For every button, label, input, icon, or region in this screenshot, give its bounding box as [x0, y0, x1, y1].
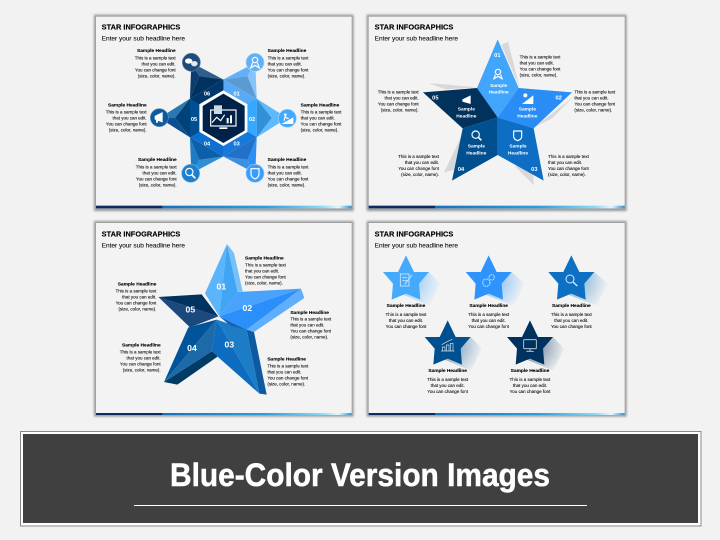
text block 02: (size, color, name). — [574, 107, 612, 112]
text block 03: (size, color, name). — [267, 382, 305, 387]
text block 01 — [520, 54, 561, 77]
text block 03: This is a sample text — [267, 364, 309, 369]
segment numbers — [432, 53, 562, 173]
text block 04: that you can edit. — [127, 355, 161, 360]
text block: top left: Sample Headline — [137, 48, 176, 54]
arm 04 — [164, 320, 219, 385]
text block: top left — [135, 48, 176, 78]
text block star 2: This is a sample text — [468, 312, 510, 317]
text block: middle right: (size, color, name). — [301, 128, 339, 133]
text block star 2: You can change font — [468, 324, 510, 329]
text block star 5: that you can edit. — [513, 383, 547, 388]
text block: middle left — [106, 103, 147, 133]
text block star 1: This is a sample text — [386, 312, 427, 317]
text block 05 — [378, 89, 419, 112]
step numbers: 05 — [191, 117, 197, 123]
segment icons — [462, 69, 533, 141]
text block: bottom right: This is a sample text — [268, 164, 309, 169]
banner heading: Blue-Color Version Images — [170, 457, 550, 493]
text block 05: Sample Headline — [118, 281, 157, 287]
text block star 3 — [551, 303, 593, 329]
subtitle: Enter your sub headline here — [102, 243, 186, 249]
text block star 3: This is a sample text — [551, 312, 593, 317]
arm numbers: 02 — [243, 303, 252, 313]
segment numbers: 02 — [556, 96, 562, 102]
3D star chart — [158, 244, 304, 395]
star 3 with magnifier icon — [548, 255, 608, 306]
text block 05: You can change font — [378, 101, 419, 106]
text block 04: that you can edit. — [405, 160, 439, 165]
text block star 4: This is a sample text — [427, 377, 469, 382]
text block: middle right — [301, 103, 342, 133]
segment 01 — [477, 39, 519, 117]
text block star 5: This is a sample text — [510, 377, 551, 382]
text block 03: This is a sample text — [548, 154, 590, 159]
segment numbers: 03 — [531, 167, 537, 173]
arm numbers: 03 — [225, 340, 234, 350]
text block 05: This is a sample text — [115, 288, 157, 293]
six-arm star chart — [159, 53, 287, 183]
step numbers: 06 — [204, 91, 210, 97]
banner — [20, 431, 702, 526]
text block 04: You can change font — [398, 166, 440, 171]
text block 01: that you can edit. — [520, 60, 554, 65]
text block 05: that you can edit. — [385, 95, 419, 100]
star 1 with document icon — [383, 255, 440, 306]
text block 04: You can change font — [120, 361, 161, 366]
text block 01: that you can edit. — [245, 268, 279, 273]
segment 05 — [423, 88, 498, 128]
text block 01: Sample Headline — [245, 255, 284, 261]
text block 03 — [267, 357, 309, 387]
icon: speech bubbles — [182, 53, 200, 71]
text block 02 — [574, 89, 616, 112]
text block 05: This is a sample text — [378, 89, 419, 94]
text block 02: You can change font — [290, 328, 332, 333]
text block: bottom left: that you can edit. — [143, 170, 177, 175]
text block star 4: that you can edit. — [431, 383, 465, 388]
text block 02: (size, color, name). — [290, 334, 328, 339]
text block 01: (size, color, name). — [520, 72, 558, 77]
segment labels: Sample — [519, 107, 536, 113]
step numbers: 01 — [234, 91, 240, 97]
subtitle: Enter your sub headline here — [375, 36, 459, 42]
text block star 3: that you can edit. — [554, 318, 588, 323]
text block 05: (size, color, name). — [381, 107, 419, 112]
text block: bottom left — [136, 157, 177, 187]
step numbers — [191, 91, 255, 148]
step numbers: 04 — [204, 142, 211, 148]
title: STAR INFOGRAPHICS — [102, 232, 181, 239]
text block star 1: Sample Headline — [387, 303, 426, 309]
text block 02 — [290, 310, 332, 339]
title: STAR INFOGRAPHICS — [375, 25, 454, 32]
subtitle: Enter your sub headline here — [102, 36, 186, 42]
text block 05: (size, color, name). — [118, 306, 156, 311]
text block star 4 — [427, 368, 469, 394]
arm 03 — [212, 320, 267, 395]
text block star 2 — [468, 303, 510, 329]
star 4 with chart icon — [425, 320, 482, 371]
icon: award ribbon — [246, 53, 264, 71]
arm numbers — [186, 282, 252, 353]
text block 03: You can change font — [548, 166, 589, 171]
text block: top right: You can change font — [268, 67, 309, 72]
icon: megaphone — [150, 109, 168, 127]
text block 02: You can change font — [574, 101, 616, 106]
text block: bottom left: Sample Headline — [138, 157, 177, 163]
segment 04 — [452, 117, 498, 181]
text block: top right — [268, 48, 309, 78]
step numbers: 02 — [249, 117, 255, 123]
text block star 5 — [510, 368, 551, 394]
text block: bottom right: Sample Headline — [268, 157, 307, 163]
segment labels — [456, 83, 538, 156]
segment 03 — [498, 117, 544, 181]
text block 01: This is a sample text — [245, 262, 287, 267]
icon: shield — [246, 164, 264, 182]
title: STAR INFOGRAPHICS — [102, 25, 181, 32]
text block 03: that you can edit. — [548, 160, 582, 165]
text block star 5: You can change font — [510, 389, 551, 394]
text block 02: Sample Headline — [290, 310, 329, 316]
segment labels: Headline — [489, 89, 509, 95]
text block: top left: (size, color, name). — [138, 73, 176, 78]
text block 03 — [548, 154, 590, 177]
text block: bottom left: (size, color, name). — [139, 182, 177, 187]
panel: slide 3, 3D star — [94, 221, 354, 417]
text block star 1 — [386, 303, 427, 329]
text block 05 — [115, 281, 157, 311]
gray star shadows — [429, 42, 573, 185]
text block: bottom right: (size, color, name). — [268, 182, 306, 187]
text block: bottom right: You can change font — [268, 176, 309, 181]
text block: bottom left: You can change font — [136, 176, 177, 181]
text block 05: that you can edit. — [122, 294, 156, 299]
text block: middle left: that you can edit. — [113, 116, 147, 121]
segment labels: Headline — [466, 150, 487, 156]
arm numbers: 04 — [187, 343, 197, 353]
text block: top right: (size, color, name). — [268, 73, 306, 78]
text block: middle left: Sample Headline — [108, 103, 147, 109]
segment labels: Headline — [508, 150, 528, 156]
text block: top right: This is a sample text — [268, 55, 309, 60]
text block star 1: You can change font — [386, 324, 427, 329]
text block: middle left: (size, color, name). — [109, 128, 147, 133]
segment numbers: 05 — [432, 95, 438, 101]
segment labels: Sample — [458, 107, 475, 113]
segment labels: Headline — [517, 113, 538, 119]
text block 02: This is a sample text — [574, 89, 616, 94]
text block 01 — [245, 255, 287, 285]
text block star 2: that you can edit. — [472, 318, 506, 323]
arm 02 — [219, 289, 304, 332]
text block 03: that you can edit. — [267, 370, 301, 375]
arm 05 — [158, 294, 218, 327]
segment numbers: 01 — [494, 53, 500, 59]
text block 01: You can change font — [245, 274, 286, 279]
center hexagon with dashboard icon — [200, 91, 247, 146]
text block: top left: You can change font — [135, 67, 176, 72]
text block 04: (size, color, name). — [401, 172, 439, 177]
text block: middle right: that you can edit. — [301, 116, 335, 121]
text block 02: This is a sample text — [290, 316, 332, 321]
text block 03: You can change font — [267, 376, 309, 381]
text block 04: (size, color, name). — [123, 367, 161, 372]
arm 01 — [205, 244, 243, 316]
text block 04: This is a sample text — [398, 154, 440, 159]
panel: slide 4, five separate stars — [367, 221, 627, 417]
text block 02: that you can edit. — [574, 95, 608, 100]
text block 04: Sample Headline — [122, 343, 161, 349]
text block: middle left: This is a sample text — [106, 110, 147, 115]
text block 04 — [398, 154, 440, 177]
text block: middle right: This is a sample text — [301, 110, 342, 115]
text block 01: (size, color, name). — [245, 280, 283, 285]
five-point star chart — [423, 39, 572, 181]
text block 01: You can change font — [520, 66, 561, 71]
segment 02 — [498, 88, 572, 128]
title: STAR INFOGRAPHICS — [375, 232, 454, 239]
segment labels: Sample — [509, 144, 527, 150]
text block star 1: that you can edit. — [389, 318, 423, 323]
arm numbers: 05 — [186, 305, 195, 315]
segment labels: Sample — [468, 144, 485, 150]
text block: middle right: You can change font — [301, 122, 342, 127]
panel: slide 1, six-arm star — [94, 15, 354, 211]
text block 05: You can change font — [116, 300, 157, 305]
segment labels: Headline — [456, 113, 477, 119]
text block star 2: Sample Headline — [469, 303, 508, 309]
text block: bottom right — [268, 157, 309, 187]
text block: top left: This is a sample text — [135, 55, 176, 60]
text block 01: This is a sample text — [520, 54, 561, 59]
icon: climbing figure — [278, 109, 296, 127]
text block: middle left: You can change font — [106, 122, 147, 127]
text block star 3: Sample Headline — [552, 303, 591, 309]
text block star 3: You can change font — [551, 324, 592, 329]
panel: slide 2, flat five-point star — [367, 15, 627, 211]
text block 02: that you can edit. — [290, 322, 324, 327]
text block: top right: that you can edit. — [268, 61, 302, 66]
subtitle: Enter your sub headline here — [375, 243, 459, 249]
text block: top right: Sample Headline — [268, 48, 307, 54]
text block 03: (size, color, name). — [548, 172, 586, 177]
text block 04 — [120, 343, 161, 372]
star 2 with gears icon — [466, 255, 525, 306]
segment labels: Sample — [490, 83, 508, 89]
text block: bottom right: that you can edit. — [268, 170, 302, 175]
text block: top left: that you can edit. — [142, 61, 176, 66]
text block star 5: Sample Headline — [511, 368, 550, 374]
text block: middle right: Sample Headline — [301, 103, 340, 109]
text block 03: Sample Headline — [267, 357, 306, 363]
text block star 4: Sample Headline — [428, 368, 467, 374]
segment numbers: 04 — [458, 167, 465, 173]
star 5 with monitor icon — [507, 320, 564, 371]
text block 04: This is a sample text — [120, 349, 161, 354]
arm numbers: 01 — [217, 282, 226, 292]
text block: bottom left: This is a sample text — [136, 164, 177, 169]
icon: magnifier — [182, 164, 200, 182]
step numbers: 03 — [234, 142, 240, 148]
text block star 4: You can change font — [427, 389, 469, 394]
